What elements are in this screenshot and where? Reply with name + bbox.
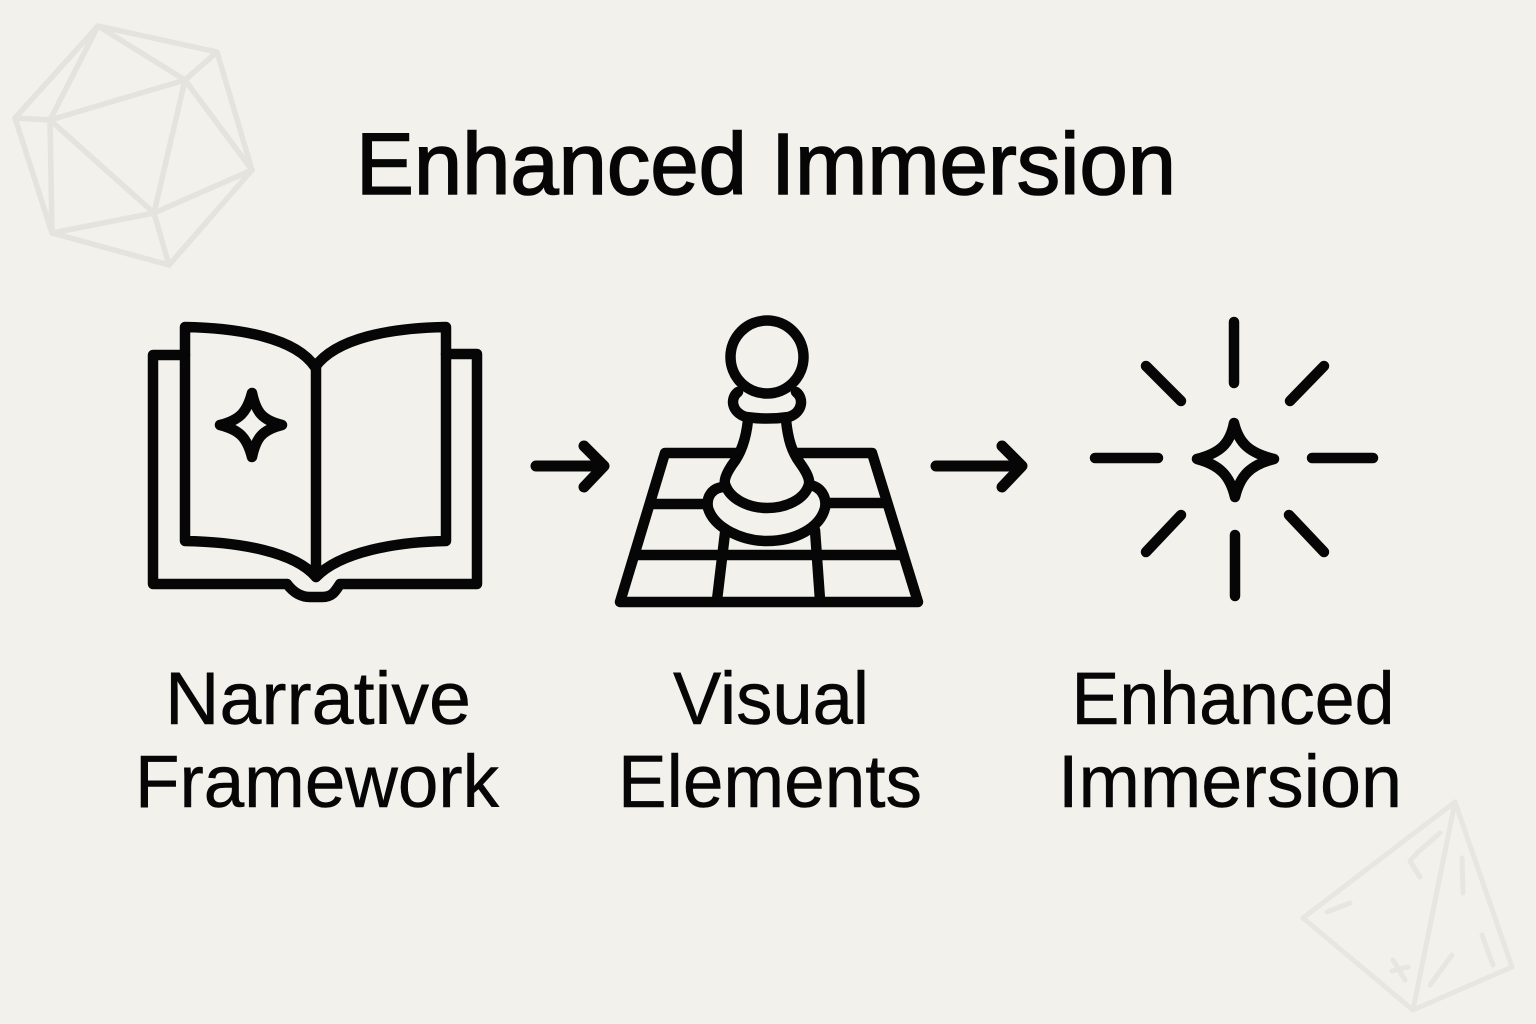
- icon: polyhedral die (decorative top left): [15, 26, 252, 265]
- icon: sparkle burst: [1095, 322, 1373, 596]
- arrow: book to chess piece: [536, 446, 604, 487]
- label: Enhanced Immersion: Enhanced: [1072, 657, 1394, 740]
- label: Narrative Framework: [135, 657, 500, 823]
- label: Narrative Framework: Narrative: [165, 657, 471, 740]
- icon: open book: [153, 327, 477, 597]
- label: Enhanced Immersion: [1058, 657, 1402, 823]
- icon: chess pawn on board: [620, 320, 918, 602]
- label: Visual Elements: [618, 657, 922, 823]
- icon: tetrahedron die (decorative bottom right): [1303, 802, 1512, 1010]
- label: Visual Elements: Elements: [618, 740, 922, 823]
- label: Enhanced Immersion: Immersion: [1058, 740, 1402, 823]
- arrow: chess piece to sparkle: [936, 446, 1022, 487]
- label: Visual Elements: Visual: [673, 657, 869, 740]
- title: Enhanced Immersion: [356, 116, 1176, 213]
- label: Narrative Framework: Framework: [135, 740, 500, 823]
